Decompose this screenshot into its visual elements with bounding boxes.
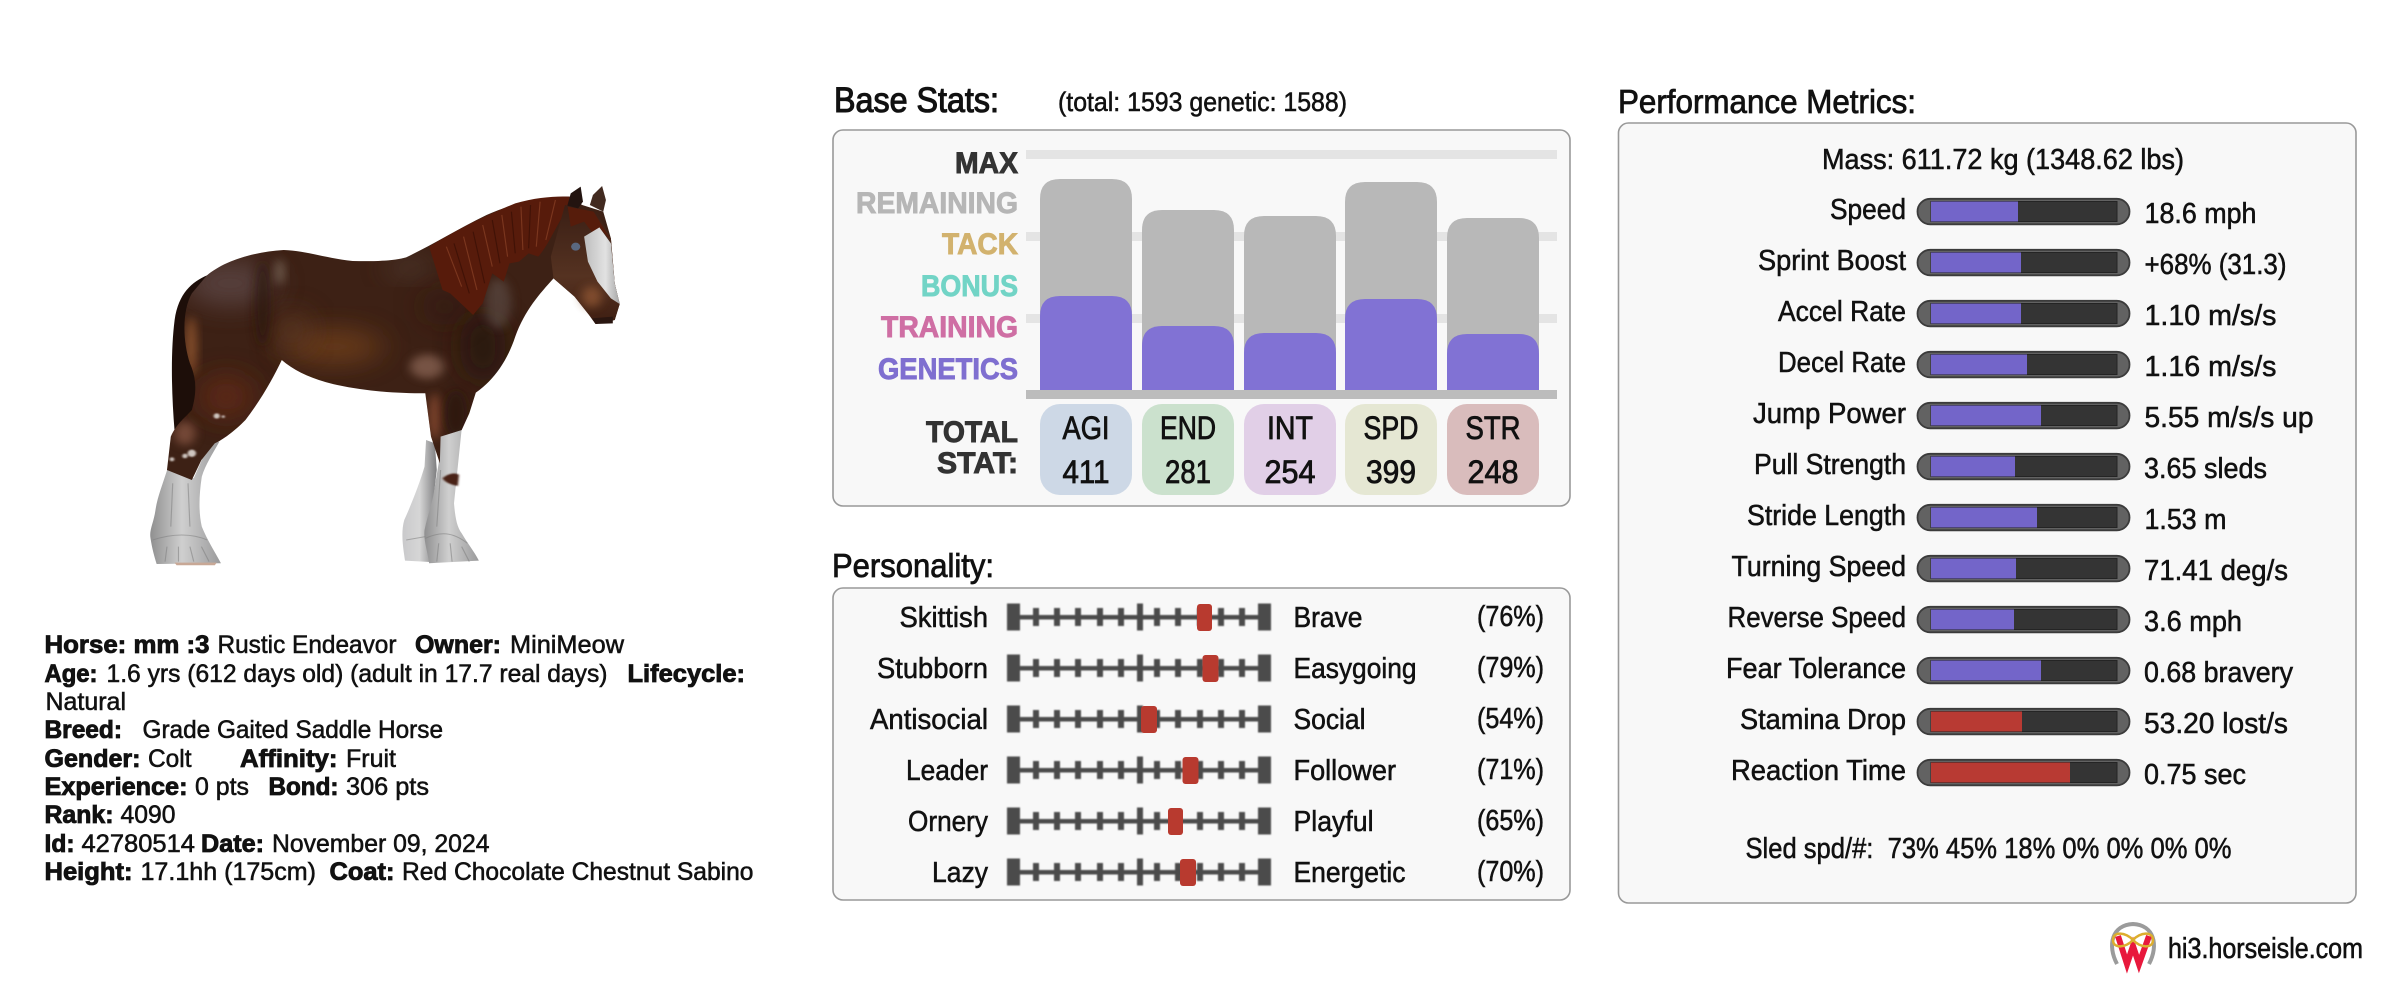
horse details text: [44, 631, 754, 886]
metric: fear tolerance: Fear Tolerance: [1726, 653, 1906, 685]
trait: leader to follower: Follower: [1294, 755, 1396, 787]
sled speed readout: Sled spd/#: 73% 45% 18% 0% 0% 0% 0%: [1746, 833, 2232, 865]
line: age and lifecycle: Natural: [46, 688, 126, 716]
eye: [571, 243, 580, 251]
metric: jump power: 5.55 m/s/s up: [2144, 402, 2314, 434]
bar: STR: [1447, 218, 1539, 390]
metric: accel rate: 1.10 m/s/s: [2144, 300, 2276, 332]
stat chip: STR: STR: [1466, 410, 1520, 446]
stat legend labels: TACK: [942, 228, 1018, 261]
trait: lazy to energetic: [932, 856, 1544, 889]
trait: lazy to energetic: Lazy: [932, 857, 988, 889]
trait: leader to follower: Leader: [906, 755, 988, 787]
metric: stamina drop: Stamina Drop: [1740, 704, 1906, 736]
metric: reverse speed: 3.6 mph: [2144, 606, 2242, 638]
stat chip: STR: 248: [1468, 454, 1518, 490]
panel: performance metrics: [1618, 123, 2356, 903]
line: id and date: Date:: [201, 830, 264, 858]
leg white flecks: [170, 413, 225, 461]
body shading: [174, 259, 511, 445]
line: experience and bond: 0 pts: [195, 773, 249, 801]
metric: speed: Speed: [1830, 194, 1906, 226]
head: [551, 205, 620, 324]
metric: reaction time: [1731, 755, 2246, 791]
line: height and coat: Height:: [44, 858, 132, 886]
stat legend labels: GENETICS: [878, 353, 1018, 386]
bar: END: [1142, 210, 1234, 390]
stat chip: END: END: [1160, 410, 1216, 446]
stat chip: AGI: 411: [1062, 454, 1110, 490]
metric: stamina drop: 53.20 lost/s: [2144, 708, 2288, 740]
hoof feather shading: [153, 470, 469, 562]
line: breed: Breed:: [44, 716, 122, 744]
metric: fear tolerance: [1726, 653, 2293, 689]
metric: speed: 18.6 mph: [2144, 198, 2256, 230]
chart baseline: [1026, 390, 1557, 399]
metric: reaction time: 0.75 sec: [2144, 759, 2246, 791]
logo: hi3.horseisle.com: [2112, 924, 2363, 965]
bar: INT: [1244, 216, 1336, 390]
total stat label: [926, 416, 1018, 480]
line: age and lifecycle: [44, 660, 745, 716]
panel: personality: [833, 588, 1570, 900]
panel: base stats: [833, 130, 1570, 506]
metric: pull strength: 3.65 sleds: [2144, 453, 2267, 485]
bar: SPD: [1345, 182, 1437, 390]
trait: antisocial to social: [870, 703, 1544, 736]
line: gender and affinity: Affinity:: [240, 745, 338, 773]
horse body: [167, 197, 620, 480]
white hind legs: [150, 442, 221, 564]
metric: decel rate: 1.16 m/s/s: [2144, 351, 2276, 383]
stat chip: END: [1142, 404, 1234, 495]
line: gender and affinity: Colt: [148, 745, 192, 773]
trait: skittish to brave: Skittish: [900, 602, 988, 634]
trait: stubborn to easygoing: [877, 652, 1544, 685]
stat chip: STR: [1447, 404, 1539, 495]
line: id and date: [44, 830, 490, 858]
icon: horseshoe emblem: [2112, 924, 2154, 964]
chart grid lines: [1026, 150, 1557, 323]
stat legend labels: REMAINING: [856, 187, 1018, 220]
trait: lazy to energetic: (70%): [1477, 856, 1544, 888]
line: experience and bond: Bond:: [268, 773, 338, 801]
metric: accel rate: [1778, 296, 2276, 332]
stat legend labels: TRAINING: [881, 311, 1018, 344]
bar chart: stats: [1026, 179, 1557, 399]
metric: fear tolerance: 0.68 bravery: [2144, 657, 2293, 689]
stat chip: SPD: [1345, 404, 1437, 495]
line: experience and bond: Experience:: [44, 773, 188, 801]
line: gender and affinity: Gender:: [44, 745, 140, 773]
trait: ornery to playful: (65%): [1477, 805, 1544, 837]
line: rank: 4090: [120, 801, 176, 829]
line: gender and affinity: Fruit: [346, 745, 396, 773]
stat chip: AGI: AGI: [1062, 410, 1110, 446]
line: id and date: 42780514: [82, 830, 195, 858]
line: horse and owner: Rustic Endeavor: [218, 631, 396, 659]
metric: sprint boost: Sprint Boost: [1758, 245, 1906, 277]
line: height and coat: Coat:: [330, 858, 394, 886]
line: height and coat: [44, 858, 754, 886]
metric: stride length: Stride Length: [1747, 500, 1906, 532]
near white foreleg: [424, 429, 479, 563]
metric: accel rate: Accel Rate: [1778, 296, 1906, 328]
trait: ornery to playful: Playful: [1294, 806, 1374, 838]
line: horse and owner: [44, 631, 625, 659]
stat chip: INT: 254: [1264, 454, 1316, 490]
line: gender and affinity: [44, 745, 396, 773]
trait: leader to follower: [906, 754, 1544, 787]
logo text: hi3.horseisle.com: [2168, 933, 2363, 965]
bar: AGI: [1040, 179, 1132, 390]
metric: sprint boost: [1758, 245, 2286, 281]
metric: reaction time: Reaction Time: [1731, 755, 1906, 787]
blaze: [584, 227, 620, 304]
stat chip: INT: [1244, 404, 1336, 495]
metric: turning speed: 71.41 deg/s: [2144, 555, 2288, 587]
line: rank: Rank:: [44, 801, 114, 829]
trait: ornery to playful: [908, 805, 1544, 838]
line: age and lifecycle: Lifecycle:: [628, 660, 745, 688]
tail: [172, 275, 208, 432]
line: height and coat: 17.1hh (175cm): [140, 858, 316, 886]
metric: turning speed: Turning Speed: [1732, 551, 1906, 583]
metric: turning speed: [1732, 551, 2288, 587]
trait: antisocial to social: (54%): [1477, 703, 1544, 735]
mane: [429, 197, 570, 315]
line: rank: [44, 801, 176, 829]
trait: skittish to brave: [900, 601, 1544, 634]
nostril: [592, 317, 613, 324]
trait: lazy to energetic: Energetic: [1294, 857, 1406, 889]
stat legend labels: BONUS: [921, 270, 1018, 303]
line: experience and bond: [44, 773, 429, 801]
hoof tips: [175, 563, 217, 565]
metric: sprint boost: +68% (31.3): [2144, 249, 2286, 281]
heading: personality: Personality:: [832, 547, 994, 584]
metric: pull strength: [1754, 449, 2267, 485]
muzzle highlight: [582, 286, 602, 307]
stat chip: END: 281: [1165, 454, 1211, 490]
line: age and lifecycle: 1.6 yrs (612 days old) (adult in 17.7 real days): [106, 660, 608, 688]
line: experience and bond: 306 pts: [346, 773, 429, 801]
trait: antisocial to social: Antisocial: [870, 704, 988, 736]
trait: leader to follower: (71%): [1477, 754, 1544, 786]
heading: performance metrics: Performance Metrics:: [1618, 83, 1916, 120]
leg brown mark: [443, 473, 459, 486]
line: breed: Grade Gaited Saddle Horse: [142, 716, 443, 744]
trait: stubborn to easygoing: Stubborn: [877, 653, 988, 685]
trait: skittish to brave: (76%): [1477, 601, 1544, 633]
line: id and date: Id:: [44, 830, 74, 858]
line: horse and owner: Owner:: [415, 631, 501, 659]
forelock: [568, 207, 611, 240]
metric: stride length: 1.53 m: [2144, 504, 2226, 536]
line: age and lifecycle: Age:: [44, 660, 98, 688]
metric: speed: [1830, 194, 2256, 230]
metric: reverse speed: [1728, 602, 2242, 638]
stat legend labels: MAX: [955, 147, 1018, 180]
metric: decel rate: Decel Rate: [1778, 347, 1906, 379]
stat legend labels: [856, 147, 1018, 386]
base stats totals: (total: 1593 genetic: 1588): [1058, 87, 1347, 117]
line: id and date: November 09, 2024: [272, 830, 490, 858]
metric: reverse speed: Reverse Speed: [1728, 602, 1906, 634]
trait: stubborn to easygoing: (79%): [1477, 652, 1544, 684]
line: height and coat: Red Chocolate Chestnut Sabino: [402, 858, 754, 886]
total stat label: STAT:: [937, 447, 1018, 480]
far white foreleg: [402, 440, 437, 562]
trait: antisocial to social: Social: [1294, 704, 1366, 736]
metric: jump power: Jump Power: [1753, 398, 1906, 430]
stat chip: SPD: SPD: [1364, 410, 1418, 446]
trait: stubborn to easygoing: Easygoing: [1294, 653, 1416, 685]
metric: stride length: [1747, 500, 2226, 536]
heading: base stats: Base Stats:: [834, 81, 999, 120]
metric: jump power: [1753, 398, 2314, 434]
metric: stamina drop: [1740, 704, 2288, 740]
stat chip: INT: INT: [1267, 410, 1313, 446]
ears: [566, 187, 583, 213]
stat chip: SPD: 399: [1366, 454, 1416, 490]
line: horse and owner: Horse: mm :3: [44, 631, 210, 659]
line: horse and owner: MiniMeow: [510, 631, 625, 659]
metric: decel rate: [1778, 347, 2276, 383]
mass readout: Mass: 611.72 kg (1348.62 lbs): [1822, 144, 2184, 176]
stat chip: AGI: [1040, 404, 1132, 495]
horse illustration: [150, 186, 620, 565]
trait: ornery to playful: Ornery: [908, 806, 988, 838]
trait: skittish to brave: Brave: [1294, 602, 1362, 634]
metric: pull strength: Pull Strength: [1754, 449, 1906, 481]
total stat label: TOTAL: [926, 416, 1018, 449]
